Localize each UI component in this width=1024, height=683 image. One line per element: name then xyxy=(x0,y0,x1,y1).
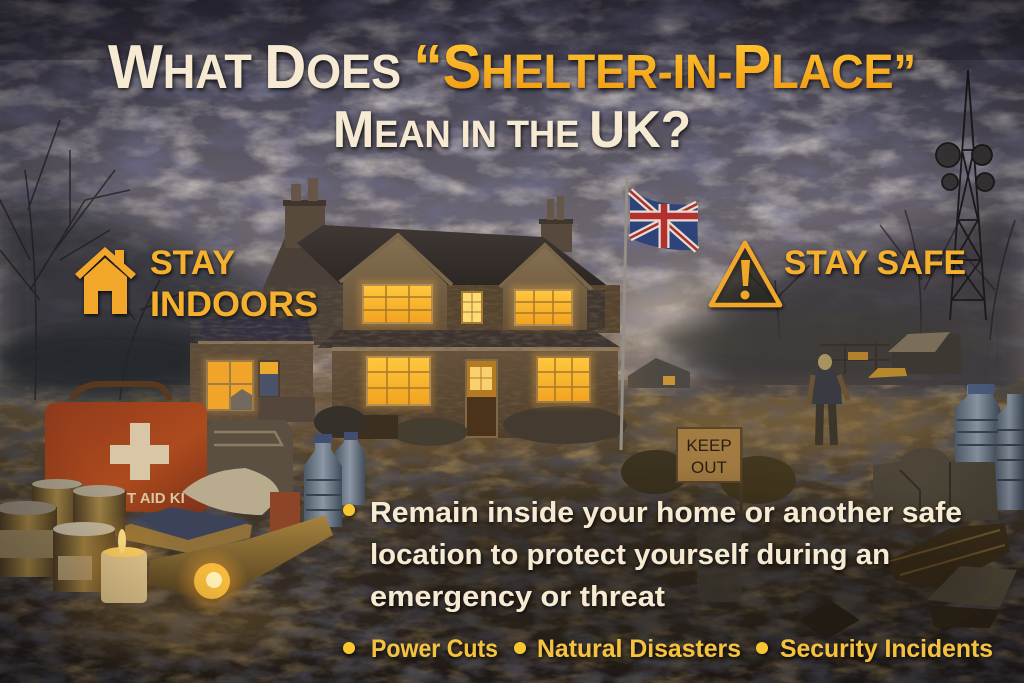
low wall xyxy=(258,397,315,422)
person walking xyxy=(809,354,848,445)
definition text block xyxy=(343,497,962,613)
distant farm and barn xyxy=(628,332,962,388)
keep out sign: KEEP xyxy=(686,436,732,455)
dark text backing xyxy=(350,495,990,655)
gable 2 xyxy=(503,247,587,331)
title line 1: WHAT DOES “SHELTER-IN-PLACE” xyxy=(108,33,916,102)
definition text block: emergency or threat xyxy=(370,581,665,613)
keep out sign: OUT xyxy=(691,458,727,477)
heading: stay indoors: STAY xyxy=(150,244,235,282)
definition text block: Remain inside your home or another safe xyxy=(370,497,962,529)
upper windows xyxy=(363,285,432,323)
heading: stay indoors: INDOORS xyxy=(150,285,318,324)
upper wall between gables xyxy=(430,285,620,333)
porch roof xyxy=(317,330,620,348)
bare trees right xyxy=(745,210,1015,350)
icon: house xyxy=(75,247,136,314)
heading: stay safe: STAY SAFE xyxy=(784,244,966,282)
gear pile right xyxy=(800,523,1017,640)
chimney right xyxy=(541,220,572,252)
candle xyxy=(67,515,177,615)
list of emergency types: Natural Disasters xyxy=(537,635,741,663)
first aid kit: T AID KI xyxy=(127,490,185,507)
house xyxy=(190,178,627,446)
door xyxy=(466,360,497,437)
radio tower xyxy=(936,70,994,320)
brick texture xyxy=(190,285,620,435)
list of emergency types xyxy=(343,635,993,663)
list of emergency types: Power Cuts xyxy=(371,635,498,663)
title line 2: MEAN IN THE UK? xyxy=(333,101,691,159)
jerry can left xyxy=(207,420,293,493)
flag and flagpole xyxy=(621,178,698,450)
lower windows xyxy=(367,357,430,405)
book and supplies xyxy=(125,468,300,553)
window glow xyxy=(203,280,594,413)
flashlight xyxy=(148,515,333,616)
bare trees left xyxy=(0,120,190,400)
water bottles left xyxy=(304,432,365,527)
gable 1 xyxy=(343,237,447,331)
glow around house xyxy=(200,300,640,460)
canned food xyxy=(0,479,126,592)
list of emergency types: Security Incidents xyxy=(780,635,993,663)
left extension xyxy=(190,343,313,421)
icon: warning triangle xyxy=(711,243,780,305)
main roof xyxy=(297,225,613,292)
chimney left xyxy=(285,203,325,248)
water bottles right xyxy=(955,384,1024,510)
left gable end wall xyxy=(263,233,345,345)
lower wall xyxy=(332,350,618,438)
definition text block: location to protect yourself during an xyxy=(370,539,890,571)
title xyxy=(108,33,916,159)
dark treeline xyxy=(0,328,225,396)
keep out sign xyxy=(621,428,796,515)
jerry can right xyxy=(873,448,998,520)
heading: stay indoors xyxy=(150,244,318,324)
shrubs and planters xyxy=(392,418,468,446)
first aid kit xyxy=(45,384,207,513)
concrete cylinder xyxy=(697,527,742,602)
